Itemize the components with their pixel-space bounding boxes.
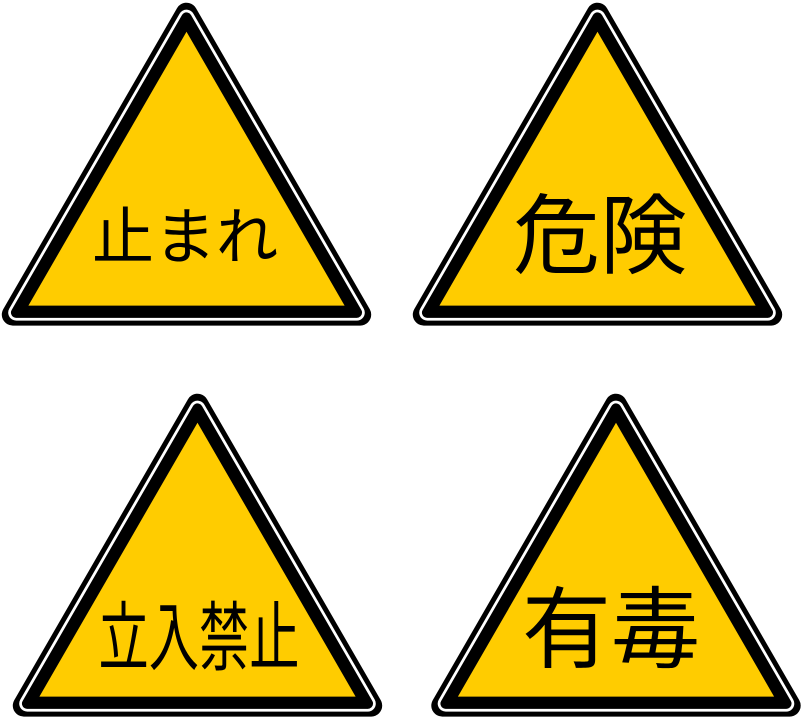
text: no entry: 立入禁止: [99, 596, 299, 680]
sign: danger: [424, 14, 771, 315]
text: stop: 止まれ: [92, 204, 278, 272]
text: toxic: 有毒: [522, 580, 700, 680]
sign: toxic: [442, 405, 790, 706]
sign: stop: [13, 14, 360, 315]
sign: no entry: [24, 405, 371, 706]
text: danger: 危険: [513, 188, 687, 286]
